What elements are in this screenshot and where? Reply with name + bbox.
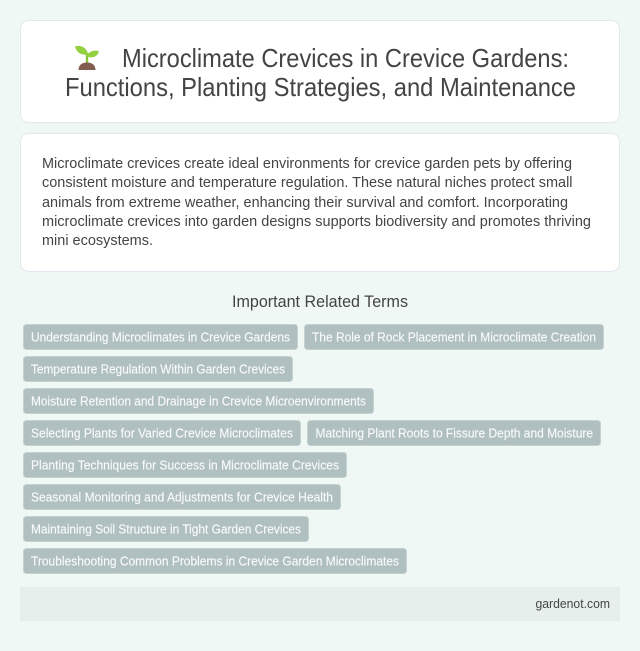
tag: understanding microclimates: Understanding Microclimates in Crevice Gardens <box>31 330 290 344</box>
introduction paragraph: microclimate crevices into garden designs supports biodiversity and promotes thriving <box>42 213 591 230</box>
tag: planting techniques <box>24 452 346 478</box>
tag: seasonal monitoring <box>24 484 340 510</box>
introduction paragraph: animals from extreme weather, enhancing their survival and comfort. Incorporating <box>42 194 568 211</box>
panel: introduction card <box>20 134 620 272</box>
tag: temperature regulation: Temperature Regulation Within Garden Crevices <box>31 362 285 376</box>
tag: rock placement: The Role of Rock Placement in Microclimate Creation <box>312 330 596 344</box>
tag: rock placement <box>304 324 604 350</box>
tag list <box>24 324 604 574</box>
title text: Microclimate Crevices in Crevice Gardens: <box>122 45 569 73</box>
footer: gardenot.com <box>536 596 610 611</box>
tag: soil structure <box>24 516 308 542</box>
icon: seedling <box>75 46 99 70</box>
tag: troubleshooting: Troubleshooting Common Problems in Crevice Garden Microclimates <box>31 554 399 568</box>
heading: important related terms: Important Related Terms <box>232 293 408 311</box>
introduction paragraph: mini ecosystems. <box>42 232 153 249</box>
tag: planting techniques: Planting Techniques for Success in Microclimate Crevices <box>31 458 339 472</box>
tag: understanding microclimates <box>24 324 298 350</box>
tag: soil structure: Maintaining Soil Structure in Tight Garden Crevices <box>31 522 301 536</box>
tag: troubleshooting <box>24 548 406 574</box>
introduction paragraph <box>42 155 591 249</box>
tag: seasonal monitoring: Seasonal Monitoring and Adjustments for Crevice Health <box>31 490 333 504</box>
introduction paragraph: consistent moisture and temperature regulation. These natural niches protect small <box>42 174 572 191</box>
panel: title card <box>20 20 620 122</box>
tag: matching plant roots: Matching Plant Roots to Fissure Depth and Moisture <box>316 426 593 440</box>
tag: selecting plants <box>24 420 300 446</box>
footer <box>20 587 620 621</box>
title text: Functions, Planting Strategies, and Maintenance <box>65 74 576 102</box>
title text <box>65 45 576 102</box>
tag: moisture retention <box>24 388 374 414</box>
tag: temperature regulation <box>24 356 292 382</box>
tag: matching plant roots <box>308 420 600 446</box>
introduction paragraph: Microclimate crevices create ideal environments for crevice garden pets by offering <box>42 155 572 172</box>
tag: moisture retention: Moisture Retention and Drainage in Crevice Microenvironments <box>31 394 366 408</box>
tag: selecting plants: Selecting Plants for Varied Crevice Microclimates <box>31 426 293 440</box>
